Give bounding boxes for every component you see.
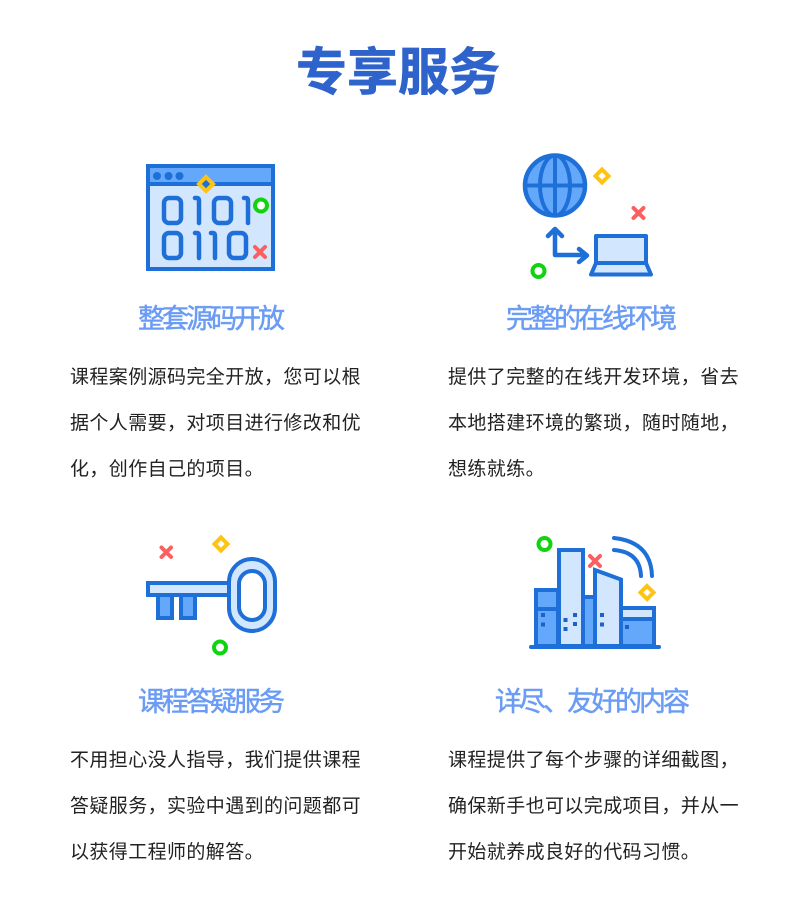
heading: online environment: 完整的在线环境 [506,304,674,334]
text: online environment: 想练就练。 [448,459,545,480]
icon: key [148,538,275,654]
text: online environment [448,366,739,480]
text: detailed content: 开始就养成良好的代码习惯。 [448,842,700,863]
text: Q&A service [70,750,361,863]
text: open source: 化，创作自己的项目。 [70,459,264,480]
text: open source: 课程案例源码完全开放，您可以根 [70,367,361,388]
heading: open source: 整套源码开放 [138,304,282,334]
title: 专享服务 [296,44,500,101]
icon: city buildings with signal [531,538,659,647]
text: detailed content: 课程提供了每个步骤的详细截图， [448,750,739,771]
text: open source [70,366,361,480]
text: Q&A service: 不用担心没人指导，我们提供课程 [70,750,361,771]
heading: Q&A service: 课程答疑服务 [138,687,282,717]
heading: detailed content: 详尽、友好的内容 [495,687,687,717]
icon: binary code window [148,166,273,269]
text: detailed content [448,750,739,863]
text: detailed content: 确保新手也可以完成项目，并从一 [448,796,739,817]
text: online environment: 本地搭建环境的繁琐，随时随地， [448,413,739,434]
text: open source: 据个人需要，对项目进行修改和优 [70,413,361,434]
text: Q&A service: 答疑服务，实验中遇到的问题都可 [70,796,361,817]
icon: globe and laptop [525,156,651,277]
text: Q&A service: 以获得工程师的解答。 [70,842,264,863]
text: online environment: 提供了完整的在线开发环境，省去 [448,367,739,388]
